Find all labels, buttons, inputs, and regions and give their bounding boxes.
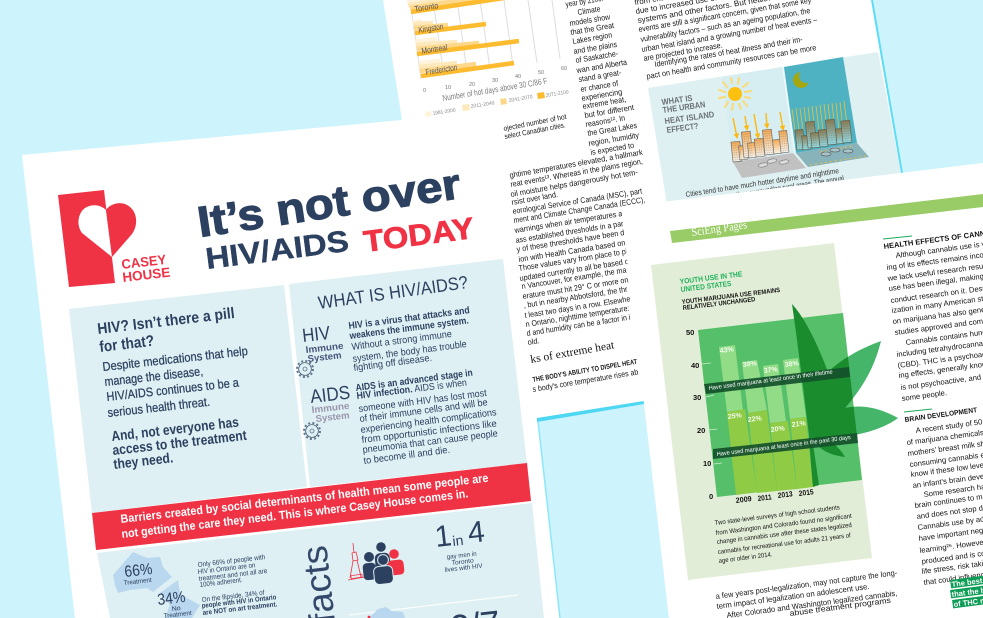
text block: narrow climate column: region, humidity — [588, 131, 640, 148]
panel: urban heat island effect — [648, 52, 901, 205]
bar values: 20% — [770, 425, 786, 434]
axis labels: 10 — [703, 459, 711, 468]
text block: AIDS definition: HIV infection. AIDS is when — [356, 378, 468, 402]
map: Ontario treatment — [113, 552, 200, 618]
chart axis title: Number of hot days above 30 C/86 F — [442, 76, 548, 103]
chart legend: 1981-2000 — [432, 107, 456, 117]
text block: narrow climate column: extreme heat, — [582, 95, 627, 111]
text block: post-legalization — [715, 568, 898, 618]
chart axis numbers: 20 — [469, 82, 475, 88]
heading: what is HIV/AIDS: WHAT IS HIV/AIDS? — [317, 272, 469, 313]
text block: narrow climate column — [565, 0, 640, 157]
text block: heat warnings column: rsist over land. — [511, 190, 559, 207]
panel: HIV? Isn't there a pill — [69, 285, 307, 513]
text block: Ontario stat: people with HIV in Ontario — [201, 594, 277, 610]
axis labels: 50 — [686, 328, 694, 337]
icon: immune cell AIDS — [304, 423, 320, 439]
text block: heat warnings column: ass established thresholds in a par — [515, 219, 624, 245]
axis labels: 20 — [697, 426, 705, 435]
chart legend — [425, 89, 569, 117]
subheading: YOUTH MARIJUANA USE REMAINS — [681, 287, 781, 306]
text block: medications: serious health threat. — [107, 395, 211, 420]
chart bars — [407, 0, 519, 76]
icon: people group — [362, 542, 405, 585]
page: HIV/AIDS fact sheet — [22, 112, 556, 618]
cars: day — [758, 158, 789, 168]
text block: heat warnings column: oil moisture helps dangerously hot tem- — [510, 168, 639, 199]
chart: youth marijuana use — [686, 304, 898, 505]
map: Ontario treatment: No — [171, 605, 182, 613]
chart city labels: Fredericton — [425, 62, 458, 77]
heat lines — [792, 101, 847, 130]
bar values: 21% — [791, 420, 807, 429]
text block: heat warnings column: ghtime temperatures elevated, a hallmark — [509, 148, 644, 180]
chart axis numbers: 30 — [492, 78, 498, 84]
text block: medications: HIV/AIDS continues to be a — [106, 375, 240, 404]
header band: SciEng Pages: SciEng Pages — [691, 219, 748, 239]
callout: the best evidence: The best — [951, 576, 983, 589]
heading: pill question — [96, 305, 236, 356]
text block: health risks column — [634, 0, 818, 81]
logo: Casey House: HOUSE — [122, 265, 171, 285]
text block: brain development: BRAIN DEVELOPMENT — [904, 407, 978, 424]
text block: heat warnings column — [509, 148, 646, 394]
map: Ontario treatment: Treatment — [123, 577, 152, 587]
text block: heat warnings column: warnings when air temperatures a — [513, 209, 623, 235]
text block: health effects of cannabis: is not psychoactive, and — [900, 372, 982, 392]
text block: access to treatment: access to the treatment — [112, 427, 248, 458]
text block: brain development — [904, 407, 983, 587]
icon: sun — [719, 78, 751, 110]
text block: heat warnings column: ion with Health Canada based on — [518, 238, 626, 264]
text block: access to treatment: they need. — [113, 449, 174, 472]
text block: HIV definition: weakens the immune system. — [348, 315, 470, 342]
text block: Ontario stat: are NOT on art treatment. — [202, 601, 278, 617]
chart caption: select Canadian cities. — [504, 120, 566, 141]
stat: 1 in 4: gay men in — [446, 551, 477, 561]
text block: health risks column: are projected to increase. — [643, 41, 723, 63]
ticks — [702, 363, 722, 464]
heading: what is the urban heat island effect: WHAT IS — [661, 93, 693, 107]
AIDS immune system label — [309, 383, 351, 425]
caption: state-level surveys — [714, 504, 853, 565]
text block: narrow climate column: stand a great- — [578, 68, 622, 84]
heading: what is the urban heat island effect: HEAT ISLAND — [664, 109, 715, 126]
arrows: sun rays — [733, 112, 783, 137]
heading: youth use: YOUTH USE IN THE — [679, 269, 743, 286]
title: It’s not over — [194, 160, 464, 247]
axis labels: 30 — [693, 393, 701, 402]
bar values: 25% — [727, 412, 743, 421]
text block: narrow climate column: wan and Alberta — [575, 58, 628, 75]
AIDS immune system label: AIDS — [309, 383, 351, 408]
text block: HIV definition: HIV is a virus that attacks and — [348, 305, 470, 332]
chart city labels: Toronto — [414, 0, 439, 14]
band labels: Have used marijuana at least once in their lifetime — [708, 369, 834, 392]
chart axis numbers: 50 — [538, 70, 544, 76]
subheading — [681, 287, 781, 312]
bar values: 37% — [763, 366, 779, 375]
text block: health risks column: vulnerability factors – such as an ageing population, the — [640, 6, 811, 44]
banner: barriers: Barriers created by social determinants of health mean some people are — [120, 471, 489, 526]
caption: cities tend: temperatures than surrounding rural areas. The annual — [699, 173, 845, 205]
panel: hot days bar chart page — [407, 0, 569, 141]
icon: CN tower — [348, 543, 365, 580]
text block: heat warnings column: ment and Climate Change Canada (ECCC), — [513, 195, 646, 225]
logo: Casey House: CASEY — [121, 252, 167, 272]
text block: narrow climate column: reasons¹². In — [585, 113, 626, 129]
text block: medications: manage the disease, — [104, 364, 204, 389]
map: Ontario treatment: 34% — [157, 589, 186, 609]
axis labels: 2013 — [777, 489, 793, 500]
chart caption: ojected number of hot — [503, 112, 568, 133]
text block: health effects of cannabis: some people. — [901, 388, 947, 403]
heading: what is the urban heat island effect: THE URBAN — [662, 99, 706, 115]
chart city labels: Kingston — [418, 21, 444, 35]
text block: narrow climate column: Climate — [577, 4, 601, 17]
text block: AIDS definition — [355, 368, 499, 467]
text block: post-legalization: a few years post-legalization, may not capture the long- — [715, 568, 898, 601]
stat: 1 in 4: Toronto — [451, 557, 474, 567]
text block: AIDS definition: pneumonia that can cause people — [362, 428, 499, 456]
buildings: day — [731, 129, 789, 162]
text block: heat warnings column: erature must hit 29° C or more on — [522, 275, 629, 301]
text block: brain development: of marijuana chemicals — [906, 428, 983, 447]
text block: HIV definition: fighting off disease. — [353, 353, 433, 374]
chart axis numbers — [423, 66, 567, 94]
text block: post-legalization: term impact of legalization on adolescent use. — [716, 582, 870, 611]
logo: Casey House — [58, 190, 171, 287]
icon: moon — [793, 69, 813, 88]
text block: health risks column: urban heat island and a growing number of heat events – — [641, 15, 818, 54]
text block: heat warnings column: Those values vary from place to pl — [518, 247, 628, 273]
text block: heat warnings column: old. — [527, 336, 540, 347]
map: lower Ontario — [368, 607, 405, 618]
heading: youth use: UNITED STATES — [680, 279, 732, 294]
chart caption — [503, 112, 568, 141]
bars: past 30 days — [727, 409, 813, 495]
text block: heat warnings column: s body's core temperature rises ab — [532, 367, 639, 394]
page: SciEng cannabis — [621, 163, 983, 618]
text block: heat warnings column: reat events¹³. Whereas in the plains region, — [510, 157, 643, 189]
caption: state-level surveys: cannabis for recreational use for adults 21 years of — [717, 532, 851, 556]
text block: narrow climate column: models show — [569, 12, 611, 28]
text block: Ontario stat: HIV in Ontario are on — [197, 562, 256, 576]
text block: narrow climate column: but for different — [584, 103, 635, 120]
AIDS immune system label: System — [315, 410, 350, 425]
stat: 1 in 4: 1 — [433, 519, 453, 554]
road: night — [796, 143, 869, 167]
cars: night — [821, 148, 853, 156]
text block: Ontario stat — [197, 554, 278, 617]
text block: Ontario stat: treatment and not all are — [198, 568, 268, 583]
night scene — [784, 57, 869, 167]
banner: barriers: not getting the care they need. This is where Casey House comes in. — [121, 486, 469, 541]
HIV immune system label — [301, 323, 344, 365]
text block: health risks column: pact on health and community resources can be more — [646, 43, 817, 81]
caption: state-level surveys: change in cannabis use after these states legalized — [716, 522, 853, 546]
day scene — [719, 67, 806, 178]
text block: Ontario stat: 100% adherent. — [199, 577, 243, 589]
chart legend: 2041-2070 — [508, 94, 533, 104]
text block: health effects of cannabis — [883, 226, 983, 403]
text block: narrow climate column: that the Great — [570, 21, 615, 37]
chart city labels — [414, 0, 458, 77]
bar values: 22% — [747, 415, 763, 424]
text block: heat warnings column: n Vancouver, for example, the ma — [521, 265, 627, 291]
axis labels: 0 — [709, 492, 713, 501]
text block: AIDS definition: from opportunistic infections like — [361, 418, 498, 446]
text block: medications: Despite medications that help — [102, 344, 248, 374]
text block: brain development: A recent study of 50 — [915, 417, 983, 435]
road: day — [733, 153, 806, 178]
background: left cyan — [0, 0, 402, 618]
buildings: night — [795, 119, 852, 150]
text block: Ontario stat: Only 66% of people with — [197, 554, 266, 569]
text block: AIDS definition: AIDS is an advanced stage in — [355, 368, 473, 394]
text block: HIV definition — [348, 305, 470, 374]
chart legend: 2071-2100 — [545, 89, 569, 99]
text block: HIV definition: system, the body has trouble — [352, 339, 468, 365]
text block: post-legalization: abuse treatment programs — [789, 596, 891, 618]
caption: state-level surveys: from Washington and Colorado found no significant — [715, 513, 852, 537]
title: TODAY — [362, 212, 476, 259]
section heading: risks of extreme heat: ks of extreme heat — [529, 339, 616, 366]
stat: 1 in 4: lives with HIV — [444, 563, 484, 574]
subheading: RELATIVELY UNCHANGED — [682, 296, 756, 312]
text block: heat warnings column: , but in nearby Abbotsford, the thr — [523, 285, 628, 310]
text block: health risks column: Identifying the rates of heat illness and their im- — [654, 35, 803, 69]
bar values: 39% — [742, 360, 758, 369]
text block: heat warnings column: d and humidity can be a factor in i — [526, 313, 631, 338]
bar values: 38% — [784, 360, 800, 369]
icon: cannabis leaf — [792, 304, 898, 487]
subheading: the body's ability: THE BODY'S ABILITY TO DISPEL HEAT — [532, 359, 638, 384]
text block: Ontario stat: On the flipside, 34% of — [201, 590, 265, 604]
stat: 1 in 4: 4 — [466, 515, 486, 550]
text block: heat warnings column: y of these thresholds have been d — [516, 228, 625, 254]
stat: 1 in 4: in — [452, 532, 464, 549]
banner: barriers — [92, 463, 531, 550]
band: lifetime — [704, 367, 850, 394]
text block: AIDS definition: someone with HIV has lost most — [358, 388, 488, 415]
heading: pill question: for that? — [98, 333, 155, 356]
axis labels: 2009 — [735, 494, 752, 505]
panel: what is HIV/AIDS — [289, 259, 527, 487]
map: Ontario treatment: 66% — [124, 561, 153, 581]
caption: state-level surveys: age or older in 2014. — [718, 551, 773, 565]
background: cyan sheet bottom centre — [537, 401, 669, 618]
heading: what is the urban heat island effect: EFFECT? — [666, 121, 699, 135]
chart legend: 2011-2040 — [470, 100, 495, 110]
HIV immune system label: Immune — [305, 341, 344, 356]
text block: heat warnings column: t least two days in a row. Elsewhe — [524, 294, 631, 320]
bar values: 43% — [719, 346, 735, 355]
axis labels — [686, 328, 814, 505]
title: HIV/AIDS — [204, 225, 351, 276]
bars: lifetime use — [719, 345, 806, 423]
text block: heat warnings column: n Ontario, nighttime temperature: — [525, 304, 630, 329]
text block: access to treatment: And, not everyone has — [111, 414, 240, 444]
text block: AIDS definition: experiencing health complications — [360, 407, 497, 436]
text block: narrow climate column: of Saskatche- — [575, 49, 619, 65]
heading: youth use — [679, 269, 743, 294]
text block: narrow climate column: is expected to — [590, 141, 635, 157]
text block: AIDS definition: of their immune cells and will be — [359, 397, 489, 425]
header band: SciEng Pages — [670, 194, 983, 243]
panel: facts — [97, 503, 544, 618]
text block: narrow climate column: and the plains — [573, 40, 618, 56]
chart axis numbers: 60 — [561, 66, 567, 72]
text block: heat warnings column: updated currently to all be based c — [519, 257, 629, 283]
text block: HIV definition: Without a strong immune — [351, 329, 453, 353]
heat dots on road — [810, 146, 866, 165]
band labels — [708, 369, 851, 458]
text block: heat warnings column: eorological Service of Canada (MSC), part — [512, 186, 643, 216]
text block: narrow climate column: experiencing — [581, 87, 623, 103]
text block: narrow climate column: Lakes region — [572, 30, 613, 46]
chart axis numbers: 0 — [423, 88, 426, 94]
band labels: Have used marijuana at least once in the past 30 days — [716, 435, 851, 458]
panel: youth use in the United States — [651, 243, 898, 580]
stat: 1 in 4 — [433, 515, 486, 574]
text block: medications — [102, 344, 248, 420]
background: top right cyan — [872, 0, 983, 173]
HIV immune system label: System — [307, 350, 342, 365]
axis labels: 2015 — [798, 487, 814, 498]
chart city labels: Montreal — [421, 42, 448, 56]
caption: state-level surveys: Two state-level surveys of high school students — [714, 504, 841, 527]
band: past 30 days — [713, 433, 858, 459]
caption: cities tend: Cities tend to have much hotter daytime and nighttime — [685, 166, 839, 199]
heading: pill question: HIV? Isn’t there a pill — [96, 305, 236, 338]
bar values — [719, 346, 807, 434]
icon: immune cell HIV — [297, 361, 313, 377]
heading: what is the urban heat island effect — [661, 93, 715, 135]
callout: the best evidence — [950, 574, 983, 609]
axis labels: 2011 — [757, 492, 772, 503]
AIDS immune system label: Immune — [311, 401, 350, 416]
HIV immune system label: HIV — [301, 323, 332, 347]
title — [194, 160, 476, 276]
text block: AIDS definition: to become ill and die. — [363, 445, 451, 467]
text block: narrow climate column: er chance of — [580, 79, 619, 94]
text block: access to treatment — [111, 414, 248, 472]
chart axis numbers: 10 — [445, 85, 451, 91]
chart gridlines — [410, 0, 560, 79]
text block: narrow climate column: the Great Lakes — [587, 121, 638, 138]
axis labels: 40 — [691, 361, 699, 370]
chart axis numbers: 40 — [515, 74, 521, 80]
